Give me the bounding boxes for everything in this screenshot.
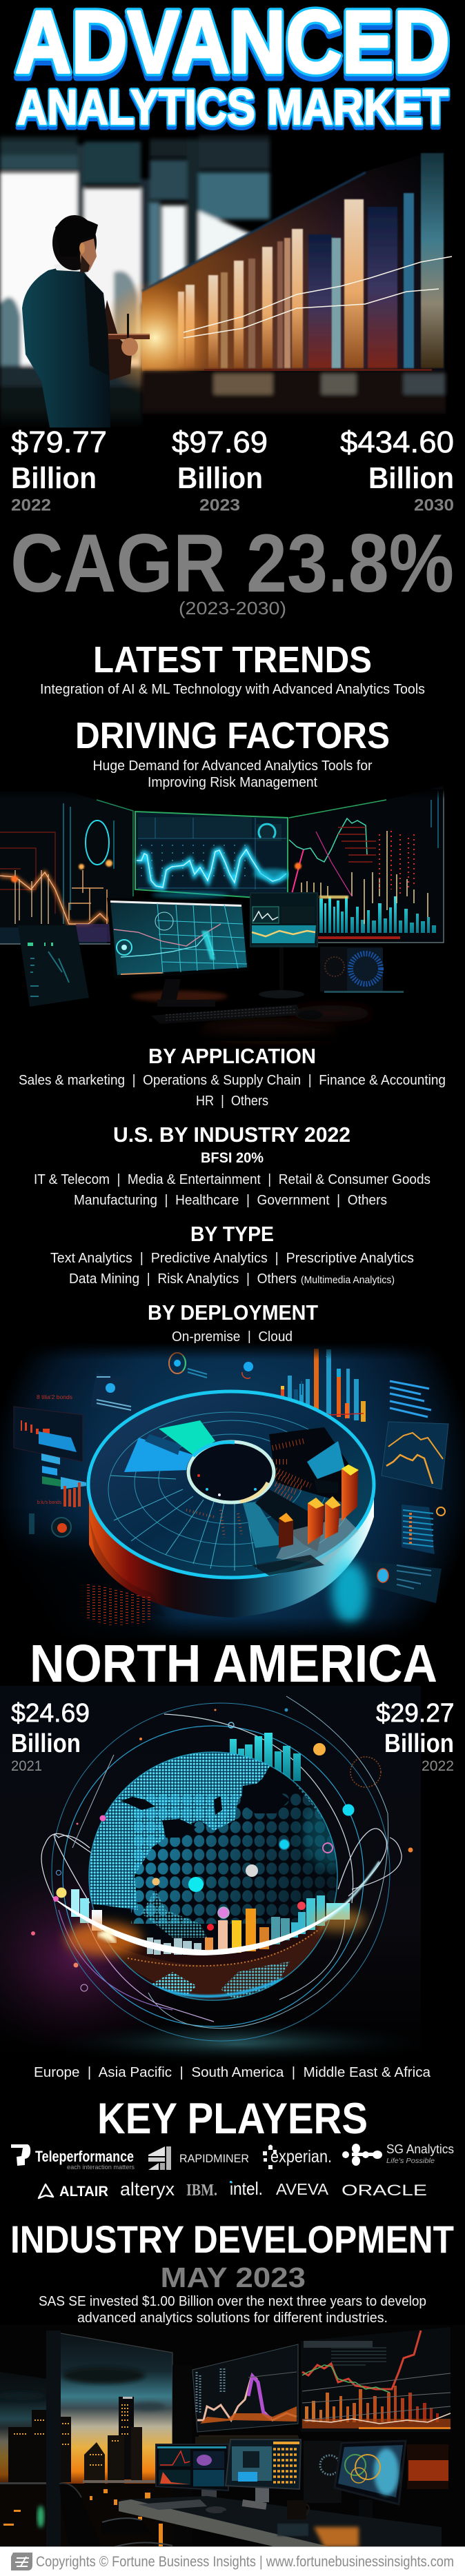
- desk: [119, 2496, 442, 2547]
- laptop: [18, 925, 89, 1007]
- logo: RapidMiner: [148, 2146, 249, 2170]
- by application: Sales & marketing | Operations & Supply Chain | Finance & Accounting: [19, 1073, 446, 1088]
- right wall screen: [289, 786, 444, 943]
- left wall screen: [0, 792, 133, 945]
- logo: Teleperformance: each interaction matters: [67, 2164, 135, 2171]
- by application: BY APPLICATION: [148, 1044, 316, 1068]
- market stat: 2023: 2023: [199, 496, 240, 514]
- market stat: 2023: $97.69: [172, 425, 268, 459]
- by deployment: [148, 1300, 318, 1345]
- driving factors: [75, 715, 390, 790]
- logo: Experian: experian.: [270, 2147, 332, 2166]
- by type: [50, 1222, 414, 1287]
- U.S. by industry: IT & Telecom | Media & Entertainment | Retail & Consumer Goods: [34, 1172, 431, 1187]
- key players heading: KEY PLAYERS: [97, 2095, 368, 2143]
- small top panels: 8 tilia'2 bonds: [37, 1394, 72, 1400]
- logo: SG Analytics: [342, 2142, 454, 2166]
- top bars behind globe: [230, 1733, 301, 1781]
- logo: Teleperformance: [11, 2144, 135, 2171]
- regional stat: 2021: Billion: [11, 1729, 81, 1758]
- icon: Fortune Business Insights logo: [11, 2553, 32, 2570]
- industry development: MAY 2023: [160, 2262, 306, 2293]
- logo: Intel: intel.: [230, 2178, 263, 2199]
- market stat: 2030: Billion: [368, 461, 454, 495]
- regional stat: 2021: 2021: [11, 1758, 42, 1774]
- cylinder body: [88, 1391, 374, 1626]
- logo: RapidMiner: RAPIDMINER: [179, 2152, 249, 2165]
- keyboard: [151, 1005, 323, 1024]
- by type: Text Analytics | Predictive Analytics | Prescriptive Analytics: [50, 1251, 414, 1266]
- industry development: SAS SE invested $1.00 Billion over the next three years to develop: [39, 2294, 426, 2309]
- logo: Aveva: AVEVA: [276, 2180, 329, 2198]
- market stat: 2023: Billion: [177, 461, 263, 495]
- logo: Oracle: ORACLE: [342, 2182, 427, 2199]
- monitor: secondary: [250, 893, 317, 998]
- by deployment: BY DEPLOYMENT: [148, 1300, 318, 1325]
- monitor: center: [226, 2439, 301, 2502]
- market stat: 2030: [340, 425, 454, 514]
- illustration: globe: [0, 1686, 421, 2057]
- logo: Alteryx: alteryx: [120, 2179, 175, 2200]
- logo: SG Analytics: SG Analytics: [386, 2142, 454, 2156]
- footer bar: [0, 2546, 465, 2576]
- globe sphere: [88, 1751, 338, 2001]
- logos: [11, 2142, 454, 2200]
- monitor: map chart: [107, 898, 249, 1007]
- window and skyline: [0, 2333, 172, 2547]
- office chair: [59, 2482, 172, 2547]
- logo: IBM: IBM.: [186, 2182, 217, 2200]
- monitor: right: [335, 2441, 406, 2520]
- small top panels: [14, 1353, 431, 1462]
- orbit rings: [41, 1696, 402, 2041]
- market stat: 2023: [172, 425, 268, 514]
- market stat: 2022: [11, 425, 107, 514]
- by application: HR | Others: [196, 1094, 268, 1109]
- industry development: [10, 2217, 454, 2326]
- market stat: 2030: 2030: [414, 496, 454, 514]
- illustration: trading desk at night: [0, 2325, 465, 2547]
- U.S. by industry: BFSI 20%: [201, 1149, 264, 1166]
- right charts: [369, 1422, 448, 1603]
- by deployment: On-premise | Cloud: [172, 1329, 293, 1345]
- glowing crescent: [57, 1862, 379, 1955]
- by type: Data Mining | Risk Analytics | Others: [69, 1271, 297, 1287]
- logo: SG Analytics: Life's Possible: [386, 2157, 435, 2165]
- regional stat: 2022: 2022: [422, 1758, 454, 1774]
- market stat: 2022: Billion: [11, 461, 97, 495]
- driving factors: Improving Risk Management: [148, 775, 317, 790]
- market stat: 2030: $434.60: [340, 425, 454, 459]
- wall screen: revenue: [301, 2327, 451, 2432]
- by type: (Multimedia Analytics): [301, 1274, 395, 1286]
- other regions: Europe | Asia Pacific | South America | Middle East & Africa: [34, 2065, 431, 2080]
- left mini charts: [21, 1420, 86, 1537]
- regional stat: 2021: $24.69: [11, 1699, 90, 1728]
- logo: Altair: ALTAIR: [59, 2184, 108, 2200]
- regional stat: 2022: [376, 1699, 454, 1774]
- U.S. by industry: Manufacturing | Healthcare | Government | Others: [74, 1193, 387, 1208]
- market stat: 2022: $79.77: [11, 425, 107, 459]
- logo: Altair: [39, 2184, 108, 2200]
- desk: [131, 991, 373, 1040]
- by type: BY TYPE: [190, 1222, 274, 1246]
- illustration: analytics screens: [0, 786, 465, 1041]
- by application: [19, 1044, 446, 1109]
- driving factors: DRIVING FACTORS: [75, 715, 390, 756]
- wall screen: candlestick: [192, 2344, 298, 2444]
- monitor: left: [156, 2444, 228, 2503]
- regional stat: 2021: [11, 1699, 90, 1774]
- data points: [31, 1709, 413, 1991]
- CAGR: (2023-2030): [179, 598, 286, 618]
- U.S. by industry: U.S. BY INDUSTRY 2022: [113, 1123, 350, 1147]
- latest trends: [40, 639, 425, 697]
- industry development: advanced analytics solutions for different industries.: [77, 2311, 388, 2326]
- driving factors: Huge Demand for Advanced Analytics Tools for: [92, 758, 373, 774]
- icon: man with tablet: [22, 215, 150, 427]
- U.S. by industry: [34, 1123, 431, 1208]
- title: [15, 0, 450, 139]
- speakers: [320, 947, 404, 993]
- logo: Teleperformance: Teleperformance: [35, 2148, 134, 2165]
- bars above cylinder: [281, 1349, 366, 1425]
- latest trends: Integration of AI & ML Technology with Advanced Analytics Tools: [40, 682, 425, 697]
- market stat: 2022: 2022: [11, 496, 51, 514]
- bars on the bowl: [71, 1889, 350, 1955]
- center wall screen: [135, 812, 292, 900]
- left mini charts: b:lu's bonds: [37, 1500, 61, 1505]
- regional stat: 2022: Billion: [384, 1729, 454, 1758]
- small screens row: [195, 2437, 448, 2503]
- illustration: analytics cylinder: [0, 1343, 465, 1641]
- latest trends: LATEST TRENDS: [93, 639, 372, 681]
- regional stat: 2022: $29.27: [376, 1699, 454, 1728]
- logo: Experian: [263, 2144, 332, 2169]
- illustration: analyst at data wall: [0, 131, 465, 429]
